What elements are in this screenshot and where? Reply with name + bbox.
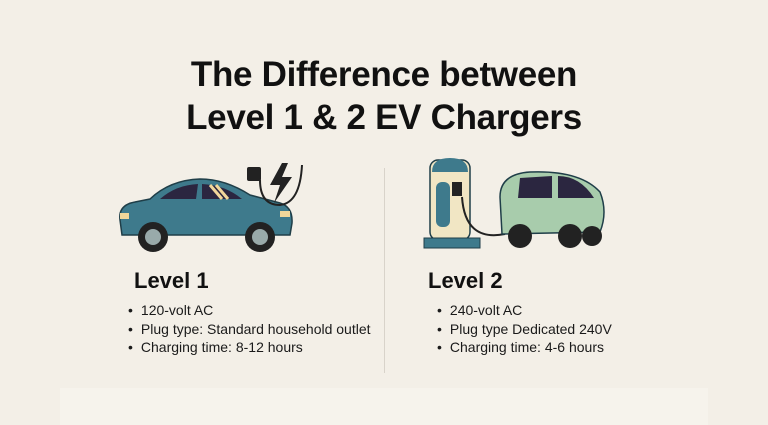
title (186, 55, 582, 137)
list: level 1 specs (128, 302, 371, 355)
list: level 2 specs: 240-volt AC (450, 302, 522, 318)
heading: level 2: Level 2 (428, 268, 503, 293)
title: The Difference between (191, 55, 577, 94)
panel: level 2 (428, 268, 612, 355)
list: level 1 specs: Plug type: Standard household outlet (141, 321, 371, 337)
title: Level 1 & 2 EV Chargers (186, 98, 582, 137)
list: level 2 specs: Plug type Dedicated 240V (450, 321, 612, 337)
icon: level 1 car with plug (119, 163, 303, 252)
heading: level 1: Level 1 (134, 268, 209, 293)
list: level 2 specs: Charging time: 4-6 hours (450, 339, 604, 355)
list: level 2 specs (438, 302, 612, 355)
panel: level 1 (128, 268, 371, 355)
icon: level 2 charging station with car (424, 158, 605, 248)
list: level 1 specs: 120-volt AC (141, 302, 213, 318)
list: level 1 specs: Charging time: 8-12 hours (141, 339, 303, 355)
